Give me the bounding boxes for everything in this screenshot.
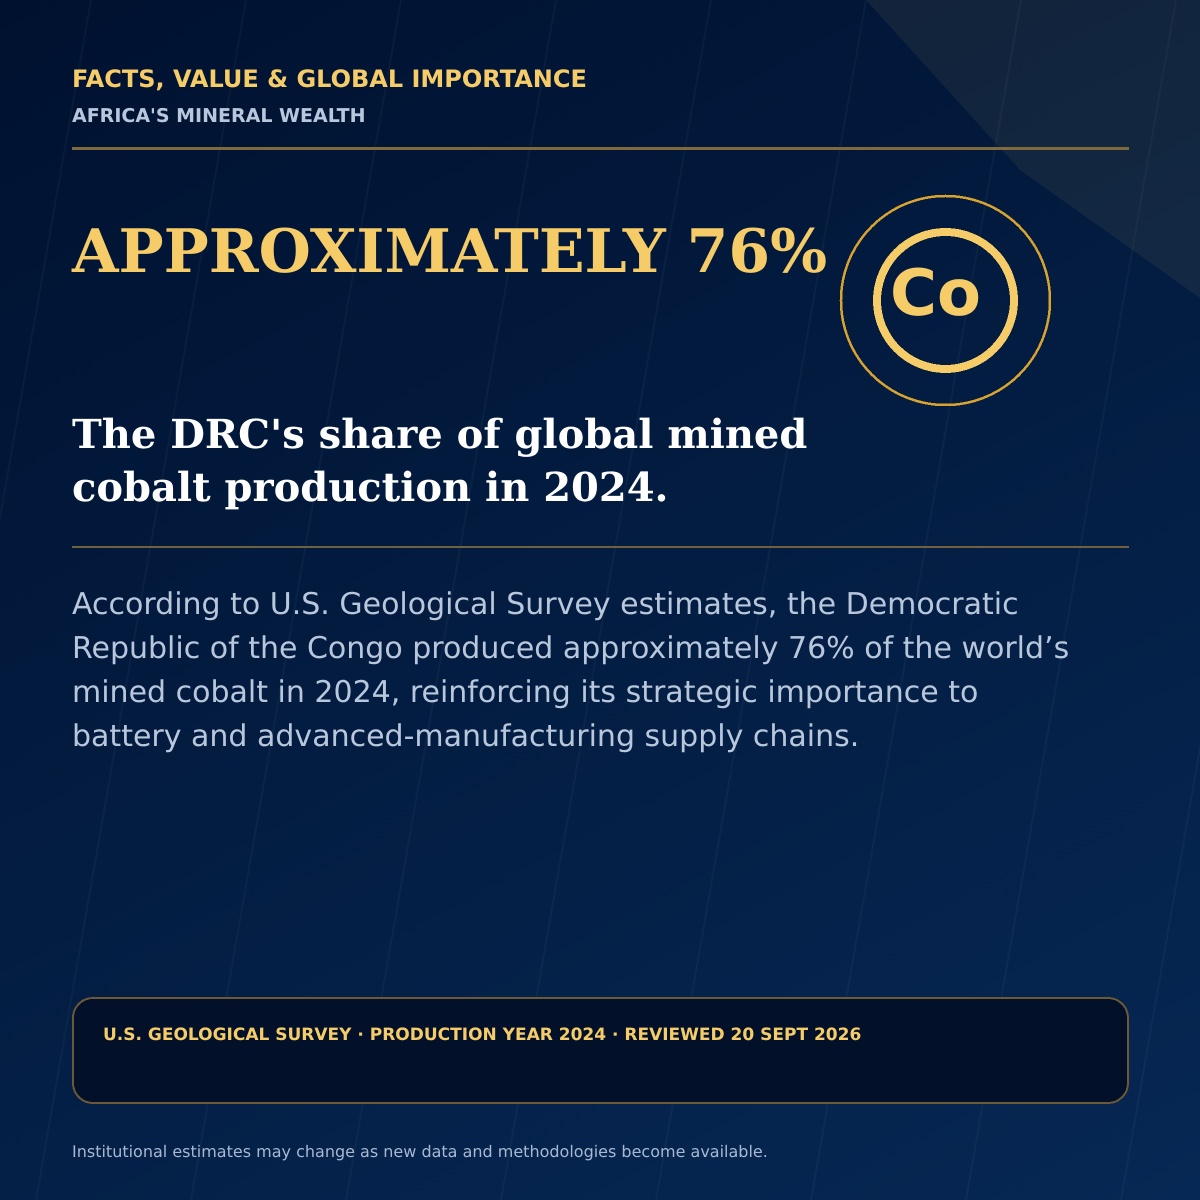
subheading: The DRC's share of global mined <box>72 411 807 458</box>
body paragraph: According to U.S. Geological Survey estimates, the Democratic <box>72 587 1019 622</box>
body paragraph: battery and advanced-manufacturing supply chains. <box>72 719 859 754</box>
source text: U.S. GEOLOGICAL SURVEY · PRODUCTION YEAR 2024 · REVIEWED 20 SEPT 2026 <box>103 1025 861 1045</box>
body paragraph: mined cobalt in 2024, reinforcing its strategic importance to <box>72 675 978 710</box>
headline statistic: APPROXIMATELY 76% <box>72 217 827 287</box>
top divider <box>72 147 1129 150</box>
icon: cobalt element badge: Co <box>890 257 981 331</box>
source panel <box>72 997 1129 1104</box>
middle divider <box>72 546 1129 548</box>
icon: cobalt element badge <box>840 194 1051 406</box>
footnote: Institutional estimates may change as new data and methodologies become available. <box>72 1142 768 1161</box>
body paragraph <box>72 587 1069 754</box>
subheading: cobalt production in 2024. <box>72 464 668 511</box>
subheading <box>72 411 807 511</box>
body paragraph: Republic of the Congo produced approximately 76% of the world’s <box>72 631 1069 666</box>
eyebrow heading: FACTS, VALUE & GLOBAL IMPORTANCE <box>72 65 587 93</box>
series label: AFRICA'S MINERAL WEALTH <box>72 105 366 127</box>
